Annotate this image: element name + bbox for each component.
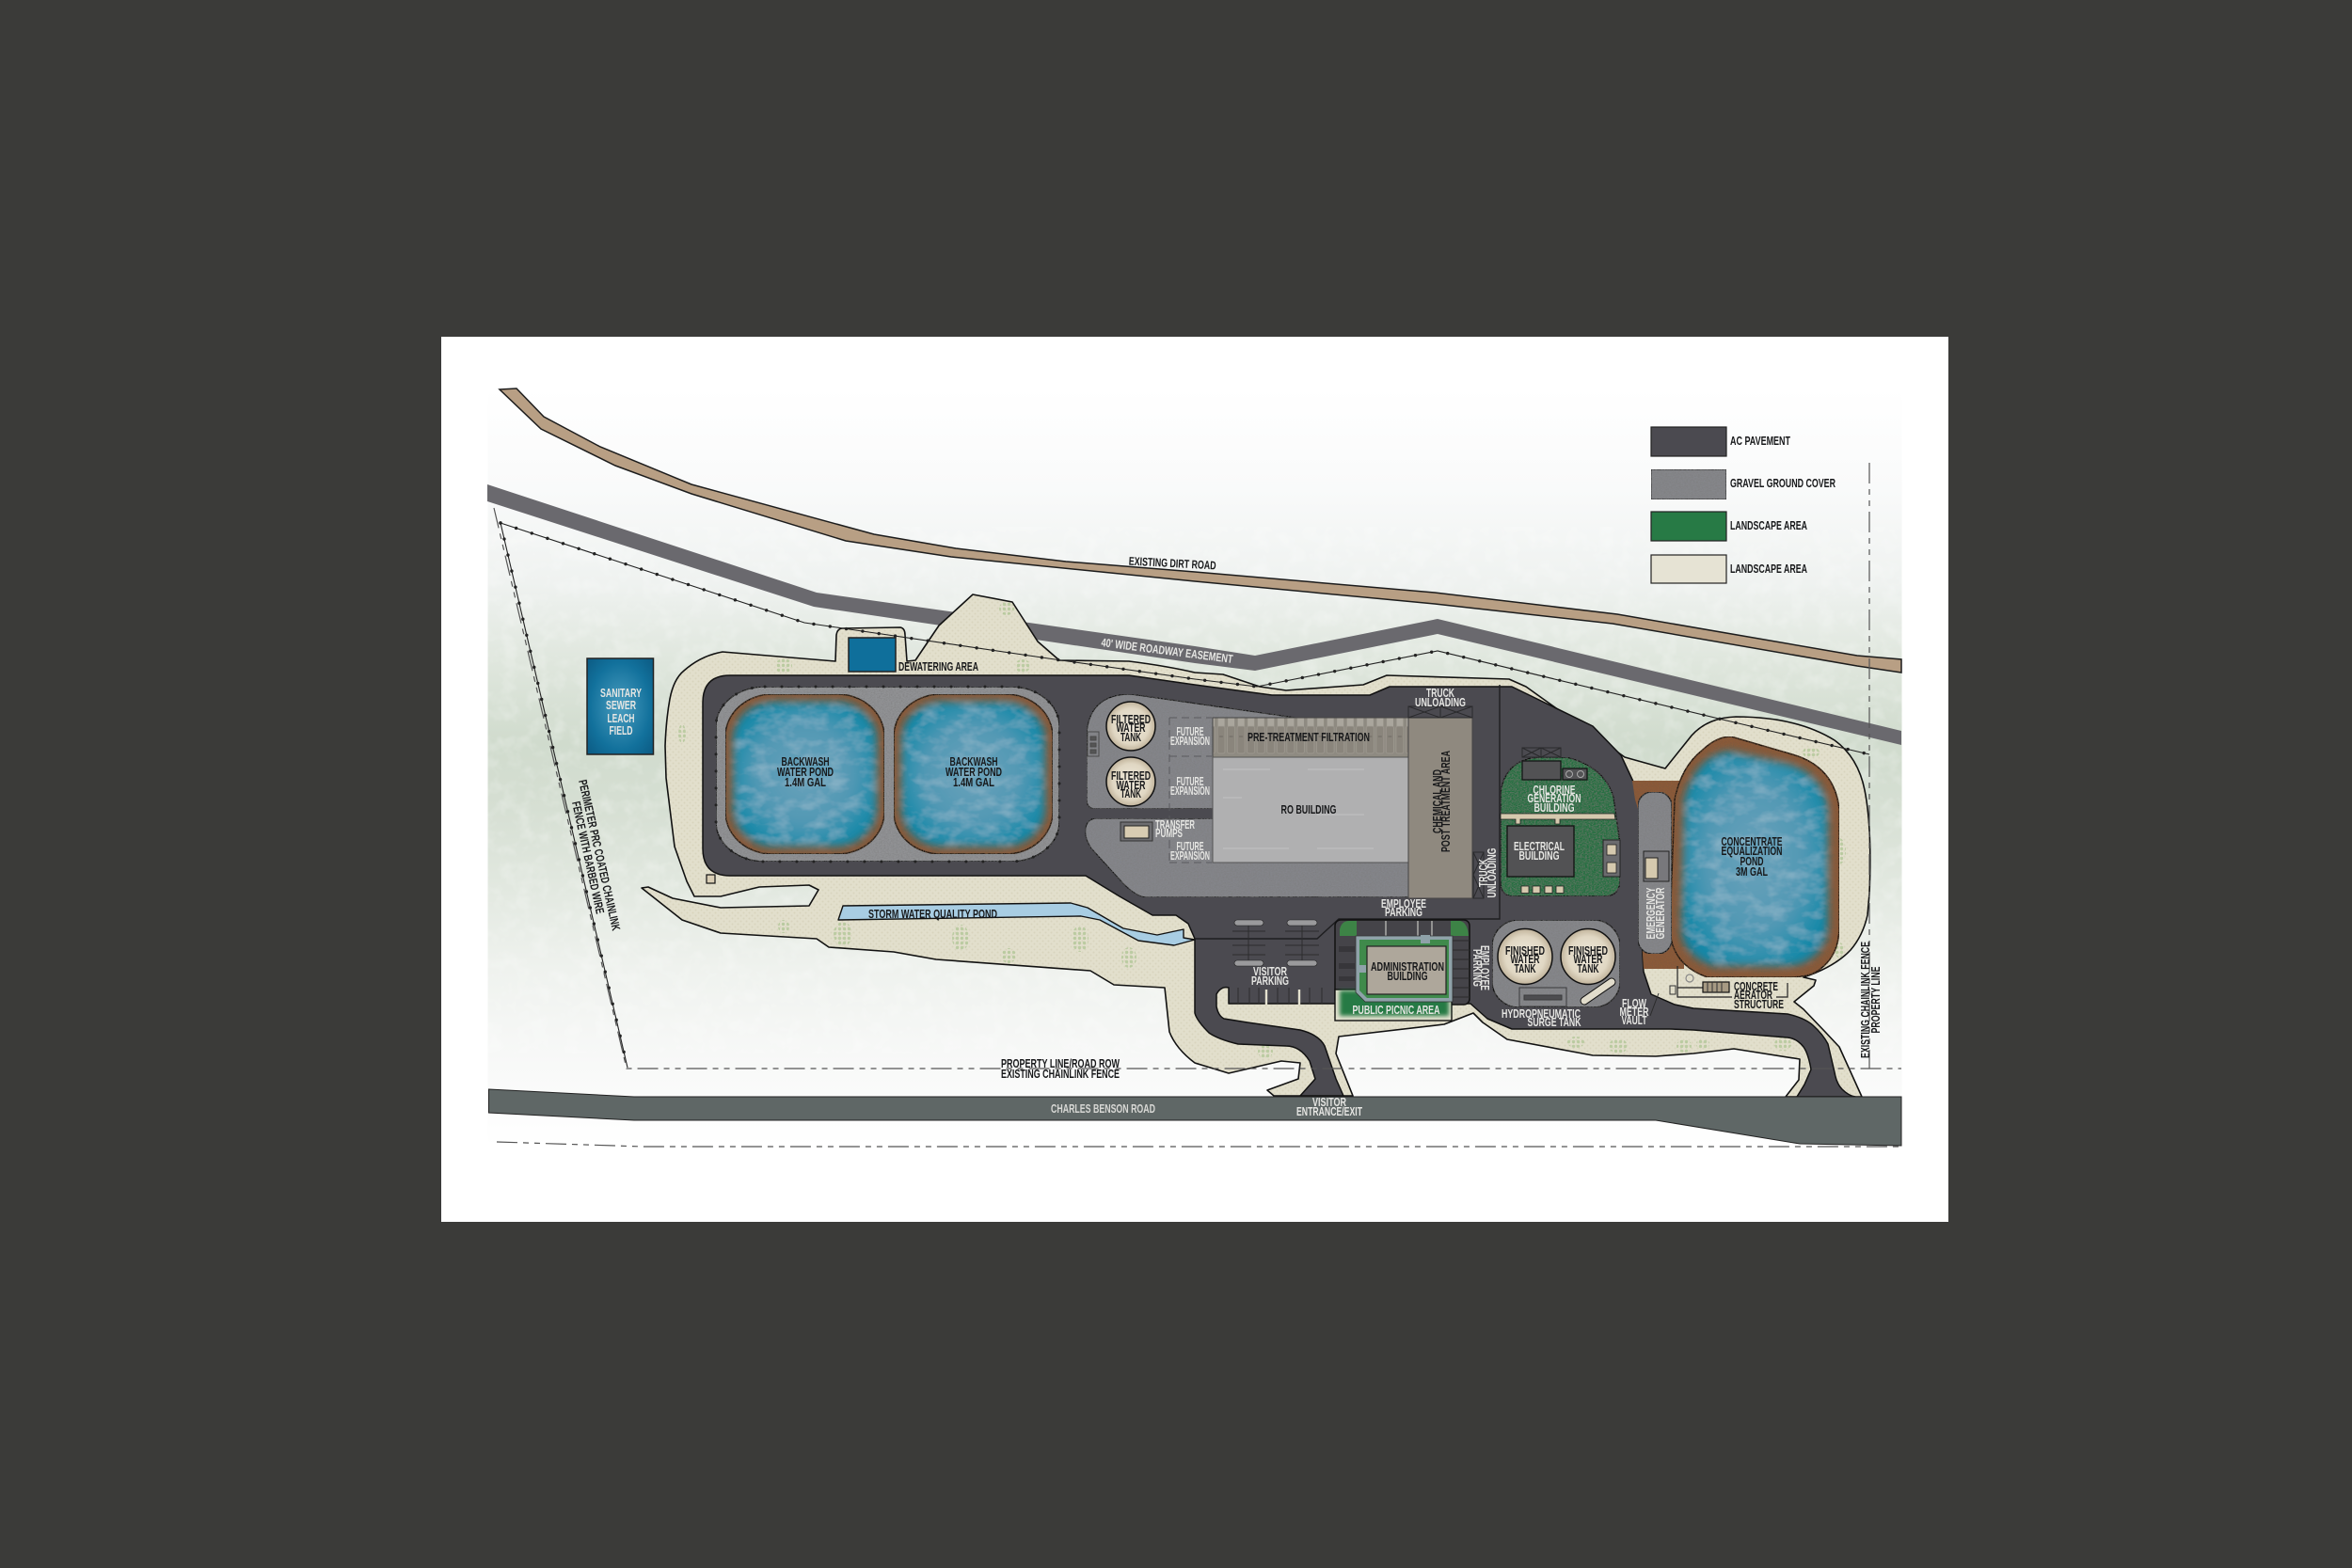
hydropneumatic equipment	[1519, 988, 1566, 1006]
Charles Benson Road	[489, 1089, 1901, 1146]
public picnic area: PUBLIC PICNIC AREA	[1353, 1004, 1439, 1017]
storm water quality pond: STORM WATER QUALITY POND	[868, 908, 997, 921]
visitor entrance and exit: VISITOR	[1312, 1096, 1346, 1109]
concentrate equalization pond: CONCENTRATE	[1722, 835, 1782, 848]
label: chlorine generation building	[1528, 784, 1581, 815]
finished water tank 2: TANK	[1577, 962, 1599, 975]
RO building	[1213, 757, 1408, 863]
legend: AC pavement	[1651, 427, 1790, 456]
AC pavement site roads	[703, 675, 1855, 1097]
brown berm strip around generator	[1632, 781, 1684, 969]
concentrate equalization pond: POND	[1740, 855, 1763, 868]
chlorine generator blocks	[1522, 748, 1587, 780]
truck unloading north: UNLOADING	[1415, 696, 1466, 709]
future expansion zones	[1169, 718, 1212, 863]
concentrate equalization pond: EQUALIZATION	[1722, 845, 1782, 858]
emergency generator	[1638, 792, 1672, 954]
label: chlorine generation building: BUILDING	[1534, 801, 1575, 815]
ground mottling	[487, 527, 1902, 1053]
filtered water tank 1: WATER	[1116, 721, 1146, 735]
label: property line road row	[1001, 1057, 1120, 1081]
site map ground wash	[487, 388, 1902, 1146]
label: perimeter fence note	[569, 779, 623, 932]
white sheet panel	[441, 337, 1948, 1222]
visitor entrance and exit	[1296, 1096, 1362, 1118]
transfer pumps: TRANSFER	[1155, 818, 1195, 832]
concrete aerator structure: STRUCTURE	[1734, 998, 1784, 1011]
label: employee parking east: PARKING	[1470, 949, 1484, 987]
finished water tank 2: FINISHED	[1568, 944, 1608, 958]
label: roadway easement: 40' WIDE ROADWAY EASEMENT	[1101, 636, 1234, 666]
backwash water pond 1: BACKWASH	[781, 755, 830, 768]
future expansion zones: FUTURE	[1176, 775, 1204, 788]
flow meter vault: VAULT	[1622, 1014, 1647, 1027]
label: existing chainlink fence property line: PROPERTY LINE	[1869, 967, 1883, 1033]
future expansion zones: FUTURE	[1176, 840, 1204, 853]
sanitary sewer leach field	[587, 658, 653, 754]
backwash water pond 1: WATER POND	[777, 766, 834, 779]
label: dewatering area: DEWATERING AREA	[898, 660, 978, 673]
sanitary sewer leach field: SEWER	[606, 699, 636, 712]
electrical building: BUILDING	[1518, 849, 1560, 863]
electrical building: ELECTRICAL	[1514, 840, 1565, 853]
visitor parking: PARKING	[1251, 974, 1289, 988]
RO building: RO BUILDING	[1281, 803, 1336, 816]
landscape area	[642, 594, 1870, 1097]
finished water tank 1: WATER	[1511, 953, 1539, 966]
public picnic area	[1335, 990, 1452, 1021]
flow meter vault: FLOW	[1622, 997, 1646, 1010]
filtered water tank 2	[1106, 757, 1155, 806]
label: employee parking east	[1470, 945, 1491, 990]
visitor parking	[1232, 920, 1322, 1005]
future expansion zones: EXPANSION	[1170, 784, 1210, 798]
filtered water tank 2: TANK	[1120, 787, 1141, 800]
perimeter fence with barbed wire	[501, 523, 1869, 1068]
label: property line road row: PROPERTY LINE/ROAD ROW	[1001, 1057, 1120, 1070]
concrete aerator structure: CONCRETE	[1734, 980, 1778, 993]
gravel pad around backwash ponds	[716, 687, 1059, 862]
visitor entrance and exit: ENTRANCE/EXIT	[1296, 1105, 1362, 1118]
chemical and post treatment area	[1408, 718, 1472, 898]
label: chlorine generation building: GENERATION	[1528, 792, 1581, 805]
legend	[1651, 427, 1836, 583]
filtered water tank 1	[1106, 702, 1155, 751]
administration compound	[1335, 920, 1470, 1021]
backwash water pond 1: 1.4M GAL	[785, 776, 826, 789]
label: employee parking east: EMPLOYEE	[1478, 945, 1491, 990]
future expansion zones: EXPANSION	[1170, 735, 1210, 748]
property line dashes	[494, 463, 1901, 1147]
legend: cream landscape area: LANDSCAPE AREA	[1730, 562, 1807, 576]
chlorine generation landscape	[1501, 757, 1620, 896]
backwash water pond 1	[725, 694, 884, 854]
filtered water tank 2: FILTERED	[1111, 769, 1151, 783]
concrete aerator structure	[1670, 966, 1788, 1011]
chemical and post treatment area: POST TREATMENT AREA	[1439, 751, 1453, 852]
gravel pad for finished water tanks	[1492, 920, 1620, 1007]
concrete aerator structure: AERATOR	[1734, 989, 1772, 1002]
filtered water tank 1: TANK	[1120, 731, 1141, 744]
flow meter vault: METER	[1620, 1006, 1648, 1019]
backwash water pond 2: BACKWASH	[950, 755, 997, 768]
finished water tank 1: FINISHED	[1505, 944, 1545, 958]
backwash water pond 2: 1.4M GAL	[953, 776, 994, 789]
legend: gravel ground cover	[1651, 469, 1836, 499]
concentrate equalization pond	[1670, 736, 1839, 977]
gravel area around filtered tanks	[1087, 694, 1295, 809]
flow meter vault	[1620, 993, 1659, 1027]
pre-treatment filtration: PRE-TREATMENT FILTRATION	[1248, 731, 1370, 744]
legend: AC pavement: AC PAVEMENT	[1730, 435, 1790, 448]
truck unloading east	[1473, 848, 1499, 898]
label: existing chainlink fence property line: EXISTING CHAINLINK FENCE	[1859, 942, 1872, 1058]
hydropneumatic surge tank: SURGE TANK	[1528, 1016, 1581, 1029]
40 foot wide roadway easement	[487, 484, 1901, 745]
finished water tank 2: WATER	[1573, 953, 1603, 966]
truck unloading east: UNLOADING	[1486, 848, 1499, 897]
transfer pumps: PUMPS	[1155, 827, 1183, 840]
label: employee parking north	[1381, 897, 1426, 919]
filtered water tank 1: FILTERED	[1111, 713, 1151, 726]
pre-treatment filtration	[1213, 718, 1408, 757]
finished water tank 2	[1561, 929, 1615, 984]
filtered tank valves	[1088, 732, 1099, 756]
truck unloading north: TRUCK	[1426, 687, 1454, 700]
sanitary sewer leach field: LEACH	[608, 712, 634, 725]
Charles Benson Road: CHARLES BENSON ROAD	[1051, 1102, 1155, 1116]
electrical cabinets	[1521, 840, 1620, 894]
future expansion zones: EXPANSION	[1170, 849, 1210, 863]
visitor parking: VISITOR	[1253, 965, 1287, 978]
hydropneumatic surge tank	[1502, 982, 1612, 1029]
existing dirt road	[500, 388, 1901, 673]
label: employee parking north: PARKING	[1385, 906, 1422, 919]
label: perimeter fence note: PERIMETER PRC COATED CHAINLINK	[576, 779, 623, 932]
label: employee parking north: EMPLOYEE	[1381, 897, 1426, 911]
hydropneumatic surge tank: HYDROPNEUMATIC	[1502, 1007, 1581, 1021]
dewatering basin	[849, 638, 896, 672]
legend: green landscape area	[1651, 512, 1807, 541]
chemical and post treatment area: CHEMICAL AND	[1431, 769, 1444, 833]
label: existing chainlink fence property line	[1859, 942, 1883, 1058]
label: chlorine generation building: CHLORINE	[1534, 784, 1575, 797]
backwash water pond 2	[894, 694, 1053, 854]
legend: cream landscape area	[1651, 555, 1807, 583]
gravel area around RO building	[1086, 818, 1409, 897]
administration building: ADMINISTRATION	[1371, 960, 1444, 974]
emergency generator: EMERGENCY	[1645, 887, 1658, 939]
legend: green landscape area: LANDSCAPE AREA	[1730, 519, 1807, 532]
sanitary sewer leach field: FIELD	[610, 724, 632, 737]
storm water quality pond	[838, 903, 1195, 945]
future expansion zones: FUTURE	[1176, 725, 1204, 738]
truck unloading east: TRUCK	[1477, 859, 1490, 887]
administration building: BUILDING	[1387, 970, 1428, 983]
finished water tank 1: TANK	[1515, 962, 1535, 975]
legend: gravel ground cover: GRAVEL GROUND COVER	[1730, 477, 1836, 490]
internal lot boundary lines	[1195, 685, 1500, 939]
cream walkway	[1501, 814, 1615, 824]
filtered water tank 2: WATER	[1116, 779, 1146, 792]
emergency generator: GENERATOR	[1654, 888, 1667, 939]
truck unloading north	[1408, 687, 1472, 718]
backwash water pond 2: WATER POND	[946, 766, 1002, 779]
concentrate equalization pond: 3M GAL	[1736, 865, 1768, 879]
electrical building	[1507, 826, 1574, 877]
administration building	[1367, 946, 1446, 994]
label: perimeter fence note: FENCE WITH BARBED WIRE	[569, 800, 607, 915]
label: property line road row: EXISTING CHAINLINK FENCE	[1001, 1068, 1120, 1081]
leach outlet small box	[707, 875, 715, 883]
label: existing dirt road: EXISTING DIRT ROAD	[1128, 555, 1216, 572]
sanitary sewer leach field: SANITARY	[600, 687, 642, 700]
finished water tank 1	[1498, 929, 1552, 984]
transfer pumps	[1120, 818, 1195, 841]
